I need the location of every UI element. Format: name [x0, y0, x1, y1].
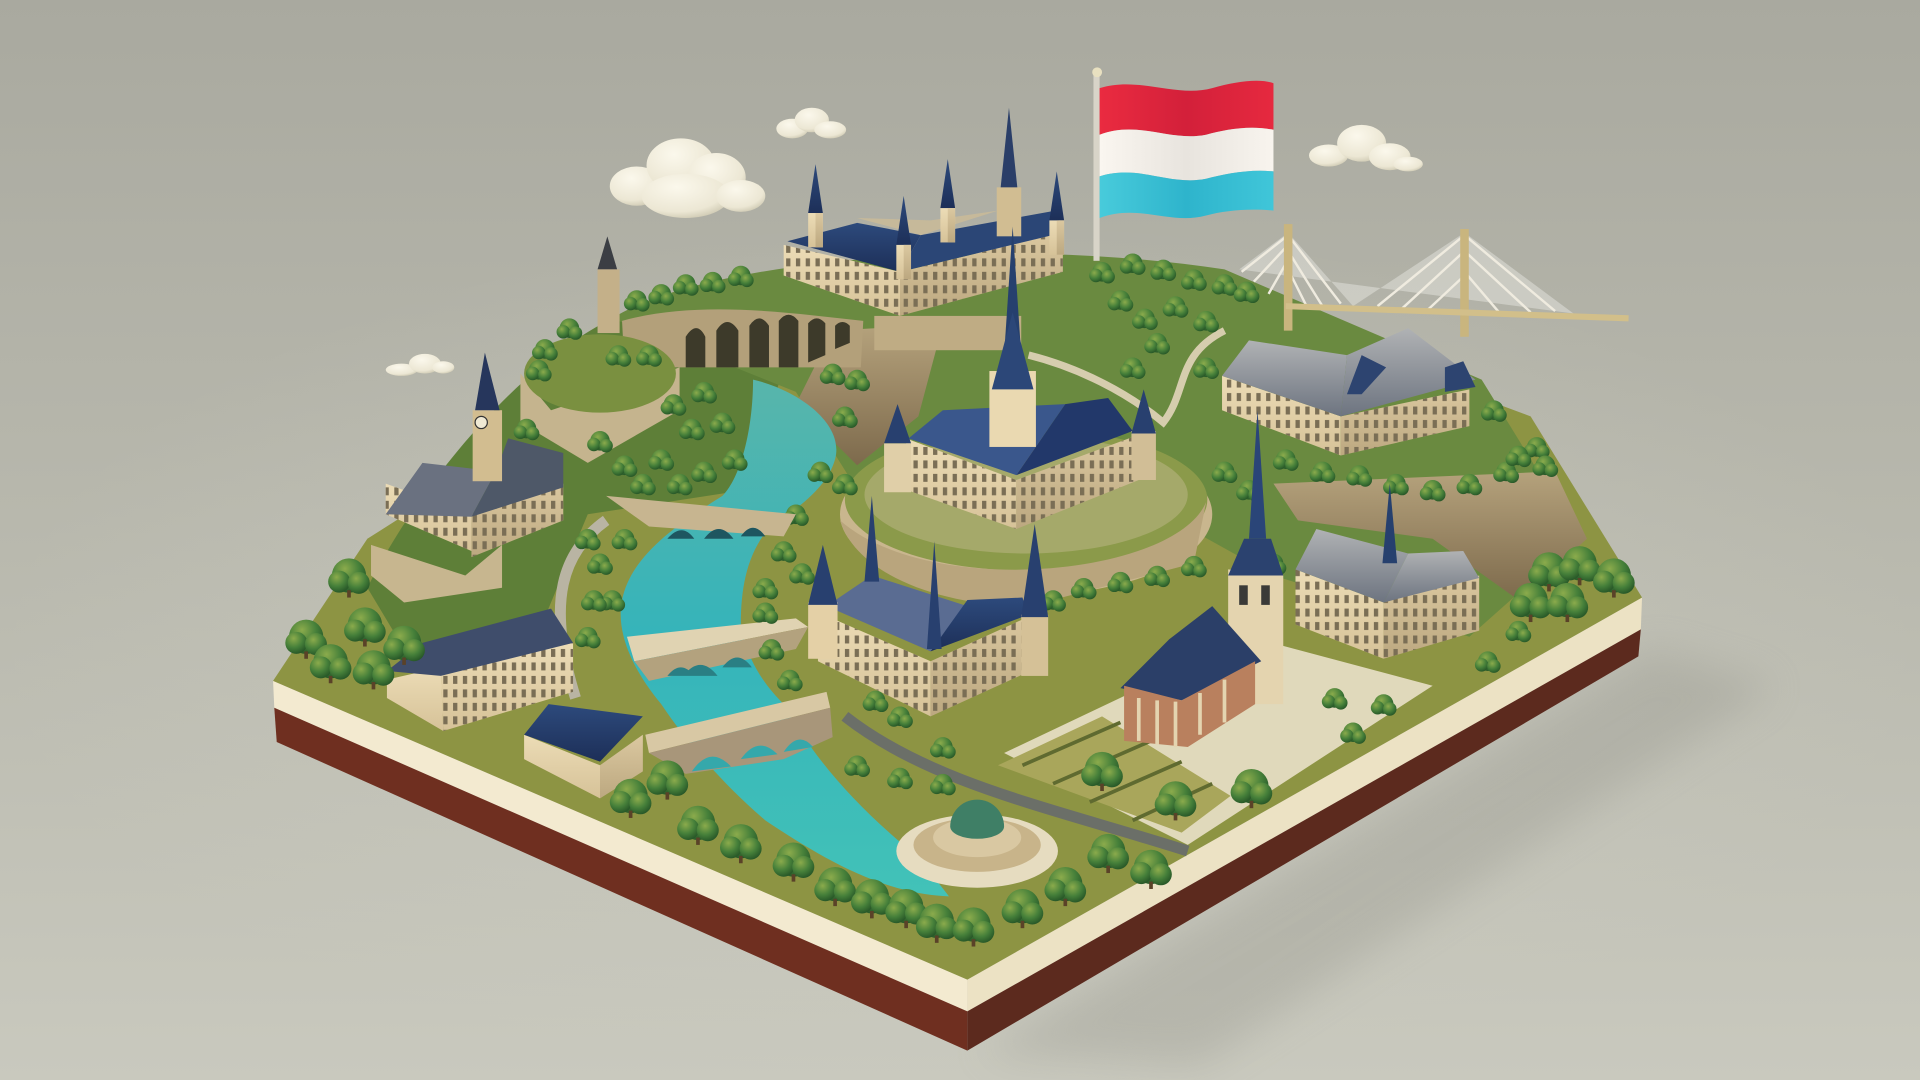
- chateau right wall: [931, 612, 1038, 716]
- red stripe: [1100, 81, 1273, 136]
- mid bridge: [627, 618, 808, 681]
- top cliff by river: [796, 324, 943, 465]
- platform base: [273, 257, 1642, 1051]
- cloud small top: [776, 108, 846, 138]
- central terrace wall: [840, 502, 1206, 606]
- soil right layer: [967, 629, 1641, 1051]
- lower trees: [285, 558, 1397, 947]
- right lower building: [1296, 484, 1479, 659]
- left clock building: [371, 353, 563, 602]
- flag: [1092, 67, 1273, 261]
- middle chateau: [808, 496, 1048, 716]
- lower left building: [387, 609, 573, 731]
- side turret left: [884, 443, 911, 492]
- garden plots: [998, 716, 1231, 833]
- clouds: [386, 108, 1423, 376]
- left tower: [598, 236, 620, 333]
- left fortress: [520, 334, 680, 463]
- chateau roof: [827, 576, 967, 651]
- castle left wall: [906, 438, 1016, 529]
- cloud left: [386, 354, 454, 376]
- right building right wall: [1341, 389, 1469, 456]
- chateau left wall: [818, 612, 931, 716]
- cream left layer: [273, 681, 967, 1011]
- lower left roof: [387, 609, 573, 676]
- clock tower: [473, 410, 502, 481]
- soil left layer: [274, 708, 967, 1051]
- lower right left wall: [1296, 569, 1384, 659]
- river: [621, 380, 949, 896]
- church: [1120, 410, 1283, 747]
- right building left wall: [1222, 376, 1341, 456]
- cable bridge: [1239, 224, 1629, 337]
- central castle: [884, 227, 1156, 529]
- white stripe: [1100, 128, 1273, 180]
- central terrace: [840, 433, 1212, 595]
- castle right wall: [1016, 435, 1139, 529]
- clock building roof: [386, 463, 496, 517]
- road curve upper right: [1029, 331, 1224, 422]
- palace roofs: [787, 223, 921, 272]
- hill masses: [367, 253, 1587, 845]
- cloud right: [1309, 125, 1423, 171]
- right upper building: [1222, 328, 1476, 456]
- road left: [560, 520, 606, 698]
- clock building walls: [386, 484, 471, 551]
- top palace: [784, 108, 1064, 350]
- palace left wing: [784, 245, 900, 316]
- left bridge: [606, 496, 796, 539]
- lower bridge: [645, 692, 833, 774]
- central spire: [1003, 227, 1022, 373]
- right cliff: [1273, 471, 1587, 600]
- clock tower spire: [1000, 108, 1018, 190]
- chateau turrets: [808, 602, 838, 659]
- church apse: [1124, 661, 1255, 747]
- side turret right: [1131, 431, 1156, 480]
- pavement areas: [1004, 637, 1433, 845]
- road right diagonal: [845, 716, 1188, 851]
- grass top: [273, 257, 1642, 980]
- right building roof: [1222, 340, 1347, 416]
- cream right layer: [967, 598, 1642, 1011]
- church tower: [1228, 569, 1283, 704]
- small lower building: [524, 704, 643, 798]
- ground shadow: [980, 649, 1776, 1065]
- castle roof: [909, 404, 1065, 475]
- lower right right wall: [1384, 576, 1479, 659]
- left hill: [367, 318, 784, 661]
- dome monument: [896, 800, 1058, 888]
- lower right roof: [1296, 529, 1408, 602]
- blue stripe: [1100, 171, 1273, 218]
- cloud large: [610, 138, 765, 218]
- flag pole: [1093, 71, 1100, 261]
- church roof: [1120, 606, 1261, 700]
- retaining wall: [371, 545, 502, 602]
- palace front wall: [900, 233, 1063, 316]
- top hill: [612, 253, 1580, 637]
- viaduct: [622, 309, 863, 367]
- upper trees: [514, 253, 1635, 673]
